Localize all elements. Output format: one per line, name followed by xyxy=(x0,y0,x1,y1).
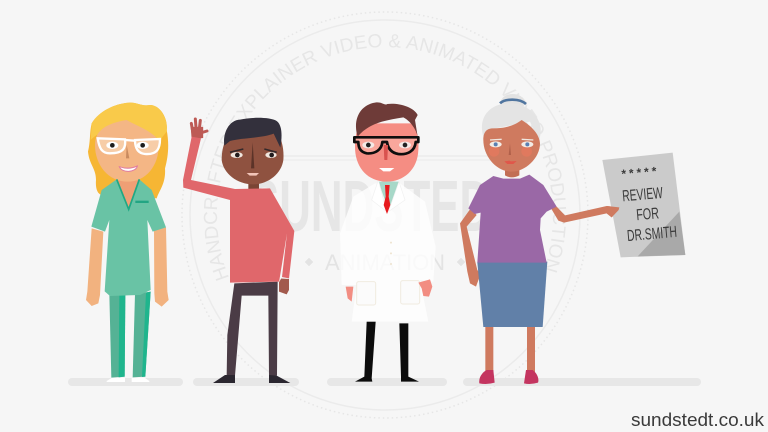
legs xyxy=(355,322,376,382)
arms xyxy=(86,228,103,306)
nose and mouth xyxy=(384,145,388,160)
skirt xyxy=(477,262,547,327)
character: waving man xyxy=(183,118,294,383)
hair xyxy=(224,118,282,148)
nose and mouth xyxy=(126,145,129,158)
neck xyxy=(248,180,259,192)
pants xyxy=(109,293,125,378)
document text: ***** xyxy=(621,164,657,181)
blouse xyxy=(468,175,557,263)
left hand xyxy=(346,287,353,302)
document text xyxy=(620,163,678,245)
eyes and brows xyxy=(231,152,243,158)
glasses xyxy=(354,137,418,154)
shoes xyxy=(107,378,149,382)
shoes xyxy=(479,370,495,384)
floor shadows xyxy=(68,378,701,386)
head xyxy=(483,120,540,172)
hair bun xyxy=(501,94,525,111)
nose and mouth xyxy=(509,143,511,155)
character: elderly woman xyxy=(460,94,619,384)
pockets xyxy=(357,282,376,305)
character: doctor xyxy=(340,102,436,382)
hair xyxy=(482,103,541,143)
watermark emblem: SUNDSTEDT xyxy=(250,167,518,247)
legs xyxy=(227,282,278,376)
pointing finger xyxy=(607,206,619,217)
tie xyxy=(384,185,390,214)
hand at hip xyxy=(279,278,289,294)
website url: sundstedt.co.uk xyxy=(631,410,765,430)
neck xyxy=(505,165,519,177)
watermark emblem: ANIMATION xyxy=(325,250,445,275)
lab coat xyxy=(340,183,436,322)
head xyxy=(355,123,418,182)
eyes xyxy=(362,142,374,148)
watermark emblem: HANDCRAFTED EXPLAINER VIDEO & ANIMATED VIDEO PRODUCTION xyxy=(204,34,566,280)
hair xyxy=(356,102,418,137)
review document xyxy=(602,153,685,257)
nose and mouth xyxy=(251,142,254,168)
cheeks xyxy=(489,146,499,157)
scrubs xyxy=(91,179,166,296)
glasses xyxy=(98,138,160,154)
sweater xyxy=(183,137,294,283)
buttons xyxy=(390,242,392,244)
right hand xyxy=(418,279,432,297)
document text: REVIEW xyxy=(622,185,664,205)
legs xyxy=(485,325,493,375)
face and neck xyxy=(117,177,139,208)
document text: FOR xyxy=(636,205,660,224)
character: nurse xyxy=(86,103,169,382)
head xyxy=(222,130,284,184)
pointing arm xyxy=(550,206,619,223)
collar shirt xyxy=(378,182,399,205)
document text: DR.SMITH xyxy=(626,224,678,245)
raised hand xyxy=(191,119,207,138)
eyes xyxy=(106,142,118,149)
lapels xyxy=(372,180,405,212)
hair back xyxy=(88,103,168,198)
shoes xyxy=(213,375,290,383)
eyes xyxy=(490,141,502,147)
watermark emblem xyxy=(182,12,588,418)
left arm xyxy=(460,208,481,287)
